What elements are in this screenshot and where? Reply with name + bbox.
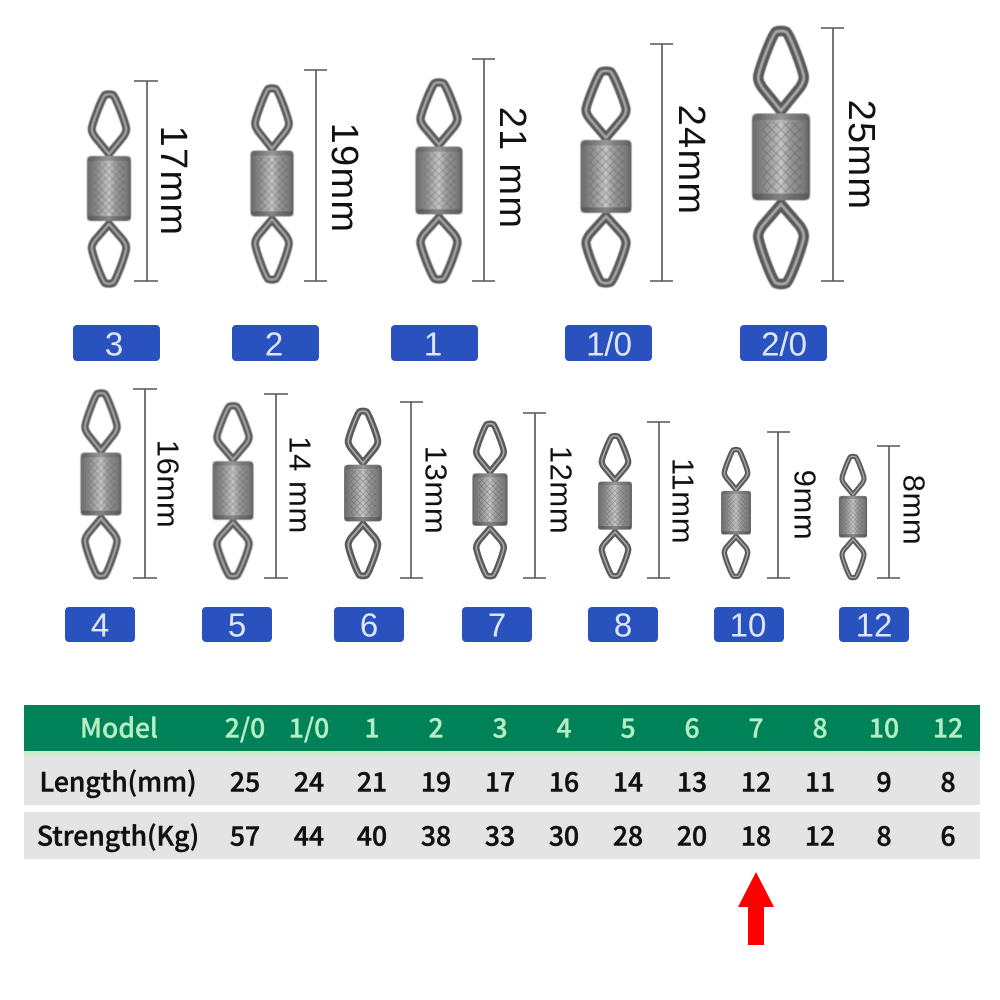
strength row: 30: [549, 814, 579, 854]
length row: 12: [741, 760, 771, 800]
badge 2: 2: [265, 326, 283, 362]
table header row: 3: [492, 706, 508, 746]
length row: [24, 755, 980, 805]
swivel size 5: [213, 406, 253, 576]
table header row: 5: [620, 706, 636, 746]
table header row: [24, 705, 980, 755]
badge 7: 7: [488, 606, 506, 644]
dimension 25mm: [821, 28, 882, 281]
length row: 9: [876, 760, 892, 800]
length row: 24: [294, 760, 324, 800]
swivel size 2: [250, 88, 294, 280]
dimension 17mm: 17mm: [152, 126, 194, 236]
dimension 11mm: 11mm: [666, 458, 700, 544]
strength row: 12: [805, 814, 835, 854]
length row: 16: [549, 760, 579, 800]
strength row: 38: [421, 814, 451, 854]
table header row: 10: [869, 706, 899, 746]
table header row: 1: [364, 706, 380, 746]
table header row: 2/0: [225, 706, 265, 746]
strength row: 44: [294, 814, 324, 854]
table header row: 2: [428, 706, 444, 746]
strength row: 6: [940, 814, 956, 854]
badge 7: [462, 606, 532, 644]
badge 6: [334, 606, 404, 644]
badge 1: [391, 325, 478, 362]
dimension 24mm: [650, 44, 712, 281]
swivel size 3: [87, 94, 131, 284]
table header row: 4: [556, 706, 572, 746]
dimension 14mm: 14 mm: [282, 436, 318, 534]
swivel size 8: [598, 436, 632, 576]
table header row: 1/0: [289, 706, 329, 746]
swivel size 6: [344, 411, 382, 576]
badge 3: 3: [105, 326, 123, 362]
badge 5: 5: [228, 606, 246, 644]
dimension 24mm: 24mm: [670, 105, 712, 215]
badge 1: 1: [424, 326, 442, 362]
specification table: [24, 705, 980, 859]
strength row: 28: [613, 814, 643, 854]
table header row: 8: [812, 706, 828, 746]
badge 3: [73, 325, 160, 362]
length row: 11: [805, 760, 835, 800]
badge 8: 8: [614, 606, 632, 644]
dimension 21mm: 21 mm: [491, 107, 533, 229]
length row: 13: [677, 760, 707, 800]
length row: 8: [940, 760, 956, 800]
length row: 14: [613, 760, 643, 800]
strength row: 33: [485, 814, 515, 854]
table header row: 7: [748, 706, 764, 746]
badge 4: 4: [91, 606, 109, 644]
swivel size 1/0: [580, 71, 632, 283]
dimension 16mm: [133, 389, 186, 578]
dimension 16mm: 16mm: [150, 440, 186, 528]
table header row: 12: [933, 706, 963, 746]
badge 10: 10: [730, 606, 766, 644]
badge 1/0: [565, 325, 652, 362]
swivel size 4: [81, 393, 121, 576]
dimension 21mm: [472, 59, 533, 281]
badge 12: [839, 606, 909, 644]
badge 12: 12: [856, 606, 892, 644]
dimension 19mm: [304, 70, 365, 281]
strength row: 18: [741, 814, 771, 854]
dimension 13mm: [400, 402, 454, 578]
badge 2/0: [740, 325, 827, 362]
dimension 17mm: [134, 81, 194, 281]
dimension 11mm: [647, 422, 700, 578]
badge 1/0: 1/0: [586, 326, 632, 362]
badge 4: [65, 606, 135, 644]
length row: 19: [421, 760, 451, 800]
badge 2/0: 2/0: [761, 326, 807, 362]
dimension 8mm: 8mm: [896, 475, 932, 545]
dimension 14mm: [264, 394, 318, 578]
swivel size 7: [472, 424, 508, 576]
badge 6: 6: [360, 606, 378, 644]
strength row: Strength(Kg): [37, 814, 199, 854]
length row: 17: [485, 760, 515, 800]
swivel size 2/0: [752, 31, 810, 284]
length row: 21: [357, 760, 387, 800]
swivel size 10: [721, 450, 751, 576]
dimension 25mm: 25mm: [840, 100, 882, 210]
strength row: 40: [357, 814, 387, 854]
dimension 19mm: 19mm: [323, 123, 365, 233]
strength row: [24, 812, 980, 859]
panel: top row swivels: [73, 28, 882, 362]
strength row: 20: [677, 814, 707, 854]
length row: Length(mm): [39, 760, 197, 800]
dimension 9mm: [767, 432, 822, 578]
dimension 8mm: [877, 446, 932, 578]
badge 5: [202, 606, 272, 644]
length row: 25: [230, 760, 260, 800]
swivel size 1: [415, 82, 463, 280]
strength row: 57: [230, 814, 260, 854]
table header row: 6: [684, 706, 700, 746]
dimension 12mm: 12mm: [544, 446, 578, 534]
dimension 9mm: 9mm: [788, 470, 822, 540]
table header row: Model: [80, 706, 158, 746]
badge 8: [588, 606, 658, 644]
dimension 13mm: 13mm: [418, 446, 454, 534]
arrow: red pointer to model 7: [738, 872, 774, 945]
badge 2: [232, 325, 319, 362]
panel: bottom row swivels: [65, 389, 932, 644]
strength row: 8: [876, 814, 892, 854]
dimension 12mm: [523, 413, 578, 578]
swivel size 12: [839, 456, 867, 578]
badge 10: [714, 606, 784, 644]
